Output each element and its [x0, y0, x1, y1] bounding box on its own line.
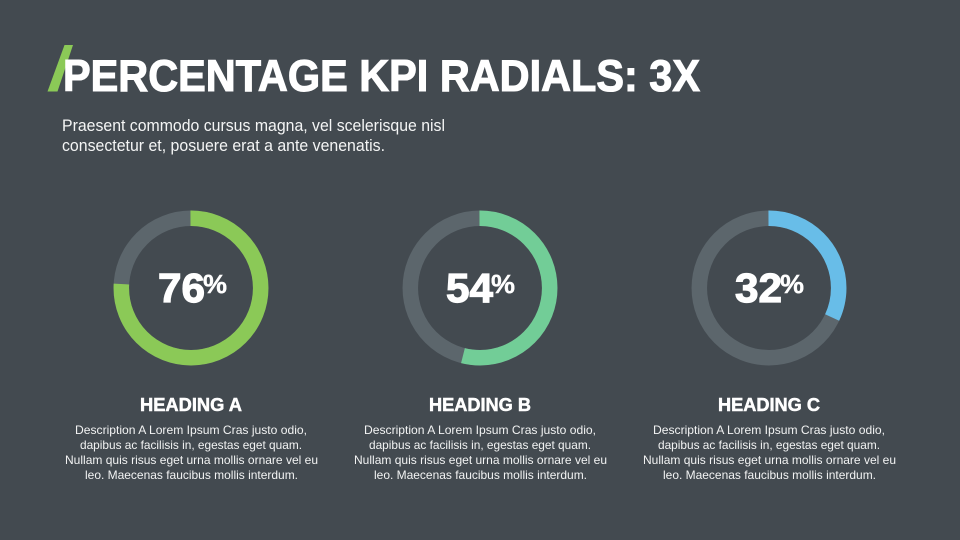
value: 54%: 54 — [446, 265, 493, 311]
heading C: HEADING C — [718, 395, 820, 415]
value: 32%: 32 — [735, 265, 782, 311]
icon: green title slash — [48, 45, 73, 92]
value: 76%: 76 — [158, 265, 205, 311]
description A: dapibus ac facilisis in, egestas eget quam. — [80, 438, 302, 452]
value: 32% — [735, 265, 804, 311]
value: 54% — [446, 265, 515, 311]
panel: KPI B — [354, 218, 607, 482]
description C: dapibus ac facilisis in, egestas eget quam. — [658, 438, 880, 452]
description C: Description A Lorem Ipsum Cras justo odio, — [653, 423, 885, 437]
description A: Nullam quis risus eget urna mollis ornare vel eu — [65, 453, 318, 467]
radial chart: 32% — [699, 218, 839, 358]
value: 54%: % — [491, 269, 515, 299]
description B: leo. Maecenas faucibus mollis interdum. — [374, 468, 587, 482]
description B: dapibus ac facilisis in, egestas eget quam. — [369, 438, 591, 452]
description B: Nullam quis risus eget urna mollis ornare vel eu — [354, 453, 607, 467]
heading B: HEADING B — [429, 395, 531, 415]
title: PERCENTAGE KPI RADIALS: 3X — [63, 52, 700, 101]
heading A: HEADING A — [140, 395, 242, 415]
description A: leo. Maecenas faucibus mollis interdum. — [85, 468, 298, 482]
description A — [65, 423, 318, 482]
description B: Description A Lorem Ipsum Cras justo odio, — [364, 423, 596, 437]
value: 76%: % — [203, 269, 227, 299]
description C: Nullam quis risus eget urna mollis ornare vel eu — [643, 453, 896, 467]
panel: KPI A — [65, 218, 318, 482]
description A: Description A Lorem Ipsum Cras justo odio, — [75, 423, 307, 437]
value: 32%: % — [780, 269, 804, 299]
subtitle text: Praesent commodo cursus magna, vel scelerisque nisl — [62, 117, 445, 135]
description C — [643, 423, 896, 482]
radial chart: 76% — [121, 218, 261, 358]
subtitle text — [62, 117, 445, 155]
value: 76% — [158, 265, 227, 311]
radial chart: 54% — [410, 218, 550, 358]
subtitle text: consectetur et, posuere erat a ante venenatis. — [62, 137, 385, 155]
description C: leo. Maecenas faucibus mollis interdum. — [663, 468, 876, 482]
panel: KPI C — [643, 218, 896, 482]
description B — [354, 423, 607, 482]
